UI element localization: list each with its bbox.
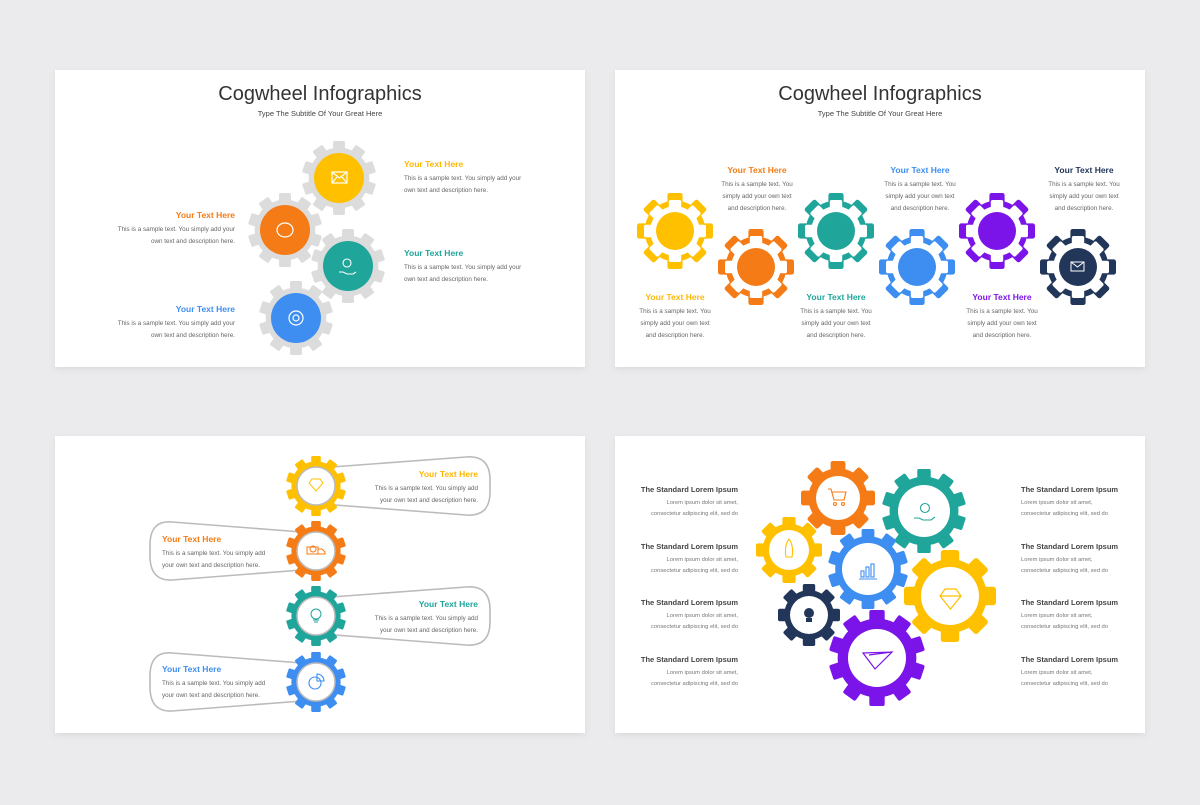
- text: orange: own text and description here.: [151, 238, 235, 245]
- icon: envelope: [1071, 262, 1084, 271]
- text: left 1: [641, 485, 738, 517]
- icon: cart: [828, 489, 846, 506]
- gear: yellow: [286, 456, 346, 516]
- text: teal bottom: This is a sample text. You: [800, 308, 872, 315]
- title: Cogwheel Infographics: [778, 83, 982, 105]
- gear: blue: [259, 281, 333, 355]
- text: yellow: This is a sample text. You simply add: [375, 485, 478, 492]
- text: right 3: [1021, 598, 1118, 630]
- text: blue: Your Text Here: [176, 304, 235, 314]
- text: right 3: consectetur adipiscing elit, sed do: [1021, 624, 1108, 630]
- text: orange top: and description here.: [728, 205, 787, 212]
- text: blue: [162, 664, 266, 699]
- text: blue: Your Text Here: [162, 664, 221, 674]
- text: yellow: Your Text Here: [419, 469, 478, 479]
- gear: navy outline: [1040, 229, 1116, 305]
- text: yellow: your own text and description here.: [380, 497, 478, 504]
- gear: navy bulb: [778, 584, 840, 646]
- text: right 2: Lorem ipsum dolor sit amet,: [1021, 557, 1093, 563]
- text: left 1: Lorem ipsum dolor sit amet,: [666, 500, 738, 506]
- callout: yellow: [318, 457, 490, 515]
- icon: bar chart: [859, 564, 877, 579]
- icon: bulb: [311, 609, 321, 622]
- gear: orange: [248, 193, 322, 267]
- text: orange: This is a sample text. You simply add: [162, 550, 266, 557]
- text: left 2: consectetur adipiscing elit, sed do: [651, 568, 738, 574]
- text: blue top: [884, 165, 956, 212]
- gear: blue: [286, 652, 346, 712]
- gear: orange: [286, 521, 346, 581]
- text: right 1: consectetur adipiscing elit, sed do: [1021, 511, 1108, 517]
- text: yellow: This is a sample text. You simply add your: [404, 175, 521, 182]
- icon: settings: [289, 311, 303, 325]
- text: blue: This is a sample text. You simply add your: [118, 320, 235, 327]
- text: left 3: [641, 598, 738, 630]
- icon: piggy bank: [277, 223, 293, 237]
- icon: money hand: [914, 504, 935, 520]
- gear: purple plane: [829, 610, 925, 706]
- text: orange top: This is a sample text. You: [721, 181, 793, 188]
- text: teal: [375, 599, 478, 634]
- text: blue top: and description here.: [891, 205, 950, 212]
- text: blue: This is a sample text. You simply add: [162, 680, 266, 687]
- text: orange: This is a sample text. You simply add your: [118, 226, 235, 233]
- panel: top-right cogwheel row: [615, 70, 1145, 367]
- text: left 1: The Standard Lorem Ipsum: [641, 485, 738, 494]
- text: left 3: consectetur adipiscing elit, sed do: [651, 624, 738, 630]
- icon: truck: [307, 546, 325, 554]
- gear: yellow outline: [637, 193, 713, 269]
- text: teal bottom: and description here.: [807, 332, 866, 339]
- text: yellow bottom: Your Text Here: [645, 292, 705, 302]
- text: right 3: The Standard Lorem Ipsum: [1021, 598, 1118, 607]
- text: left 4: Lorem ipsum dolor sit amet,: [666, 670, 738, 676]
- text: right 2: [1021, 542, 1118, 574]
- text: left 1: consectetur adipiscing elit, sed do: [651, 511, 738, 517]
- text: yellow: [404, 159, 521, 194]
- text: orange: Your Text Here: [176, 210, 235, 220]
- text: left 2: [641, 542, 738, 574]
- gear: teal: [311, 229, 385, 303]
- panel: bottom-left gear callouts: [55, 436, 585, 733]
- gear: purple outline: [959, 193, 1035, 269]
- text: navy top: and description here.: [1055, 205, 1114, 212]
- icon: envelope: [332, 172, 347, 183]
- icon: diamond: [940, 589, 961, 609]
- text: right 1: The Standard Lorem Ipsum: [1021, 485, 1118, 494]
- text: right 4: consectetur adipiscing elit, sed do: [1021, 681, 1108, 687]
- gear: teal outline: [798, 193, 874, 269]
- text: right 4: [1021, 655, 1118, 687]
- text: blue: own text and description here.: [151, 332, 235, 339]
- gear: teal money: [882, 469, 966, 553]
- subtitle: Type The Subtitle Of Your Great Here: [258, 109, 382, 118]
- text: purple bottom: This is a sample text. You: [966, 308, 1038, 315]
- text: navy top: simply add your own text: [1049, 193, 1119, 200]
- text: yellow: [375, 469, 478, 504]
- text: blue top: This is a sample text. You: [884, 181, 956, 188]
- text: orange top: Your Text Here: [727, 165, 787, 175]
- icon: diamond: [309, 479, 323, 491]
- text: yellow: Your Text Here: [404, 159, 463, 169]
- text: right 1: [1021, 485, 1118, 517]
- text: orange: [162, 534, 266, 569]
- text: teal: own text and description here.: [404, 276, 488, 283]
- text: teal: [404, 248, 521, 283]
- text: right 4: The Standard Lorem Ipsum: [1021, 655, 1118, 664]
- text: orange: Your Text Here: [162, 534, 221, 544]
- text: orange: [118, 210, 235, 245]
- icon: pie chart: [309, 674, 324, 689]
- text: left 4: consectetur adipiscing elit, sed do: [651, 681, 738, 687]
- text: navy top: This is a sample text. You: [1048, 181, 1120, 188]
- text: teal: This is a sample text. You simply add: [375, 615, 478, 622]
- text: right 3: Lorem ipsum dolor sit amet,: [1021, 613, 1093, 619]
- text: blue top: Your Text Here: [890, 165, 950, 175]
- callout: orange: [150, 522, 315, 580]
- text: teal: your own text and description here.: [380, 627, 478, 634]
- text: yellow: own text and description here.: [404, 187, 488, 194]
- icon: bulb: [804, 608, 814, 622]
- icon: rocket: [785, 539, 793, 557]
- gear: blue outline: [879, 229, 955, 305]
- subtitle: Type The Subtitle Of Your Great Here: [818, 109, 942, 118]
- gear: big yellow diamond: [904, 550, 996, 642]
- text: orange top: [721, 165, 793, 212]
- text: orange: your own text and description here.: [162, 562, 260, 569]
- text: right 2: The Standard Lorem Ipsum: [1021, 542, 1118, 551]
- gear: blue chart: [828, 529, 908, 609]
- text: left 3: Lorem ipsum dolor sit amet,: [666, 613, 738, 619]
- text: yellow bottom: This is a sample text. You: [639, 308, 711, 315]
- callout: blue: [150, 653, 315, 711]
- text: right 2: consectetur adipiscing elit, sed do: [1021, 568, 1108, 574]
- text: teal bottom: Your Text Here: [806, 292, 866, 302]
- gear: teal: [286, 586, 346, 646]
- text: right 4: Lorem ipsum dolor sit amet,: [1021, 670, 1093, 676]
- text: teal: Your Text Here: [419, 599, 478, 609]
- callout: teal: [318, 587, 490, 645]
- text: left 4: The Standard Lorem Ipsum: [641, 655, 738, 664]
- text: yellow bottom: and description here.: [646, 332, 705, 339]
- text: navy top: [1048, 165, 1120, 212]
- text: right 1: Lorem ipsum dolor sit amet,: [1021, 500, 1093, 506]
- icon: money hand: [339, 259, 356, 274]
- text: left 4: [641, 655, 738, 687]
- panel: top-left cogwheel: [55, 70, 585, 367]
- text: yellow bottom: simply add your own text: [640, 320, 710, 327]
- panel: bottom-right gear cluster: [615, 436, 1145, 733]
- text: teal: Your Text Here: [404, 248, 463, 258]
- text: navy top: Your Text Here: [1054, 165, 1114, 175]
- text: left 2: The Standard Lorem Ipsum: [641, 542, 738, 551]
- icon: paper plane: [863, 652, 892, 669]
- text: teal bottom: simply add your own text: [801, 320, 871, 327]
- text: purple bottom: and description here.: [973, 332, 1032, 339]
- text: blue: your own text and description here.: [162, 692, 260, 699]
- text: purple bottom: Your Text Here: [972, 292, 1032, 302]
- gear: small yellow rocket: [756, 517, 822, 583]
- text: yellow bottom: [639, 292, 711, 339]
- title: Cogwheel Infographics: [218, 83, 422, 105]
- text: teal bottom: [800, 292, 872, 339]
- gear: yellow: [302, 141, 376, 215]
- text: blue top: simply add your own text: [885, 193, 955, 200]
- text: purple bottom: simply add your own text: [967, 320, 1037, 327]
- text: orange top: simply add your own text: [722, 193, 792, 200]
- text: left 2: Lorem ipsum dolor sit amet,: [666, 557, 738, 563]
- gear: orange outline: [718, 229, 794, 305]
- text: blue: [118, 304, 235, 339]
- gear: orange cart: [801, 461, 875, 535]
- text: left 3: The Standard Lorem Ipsum: [641, 598, 738, 607]
- text: teal: This is a sample text. You simply add your: [404, 264, 521, 271]
- text: purple bottom: [966, 292, 1038, 339]
